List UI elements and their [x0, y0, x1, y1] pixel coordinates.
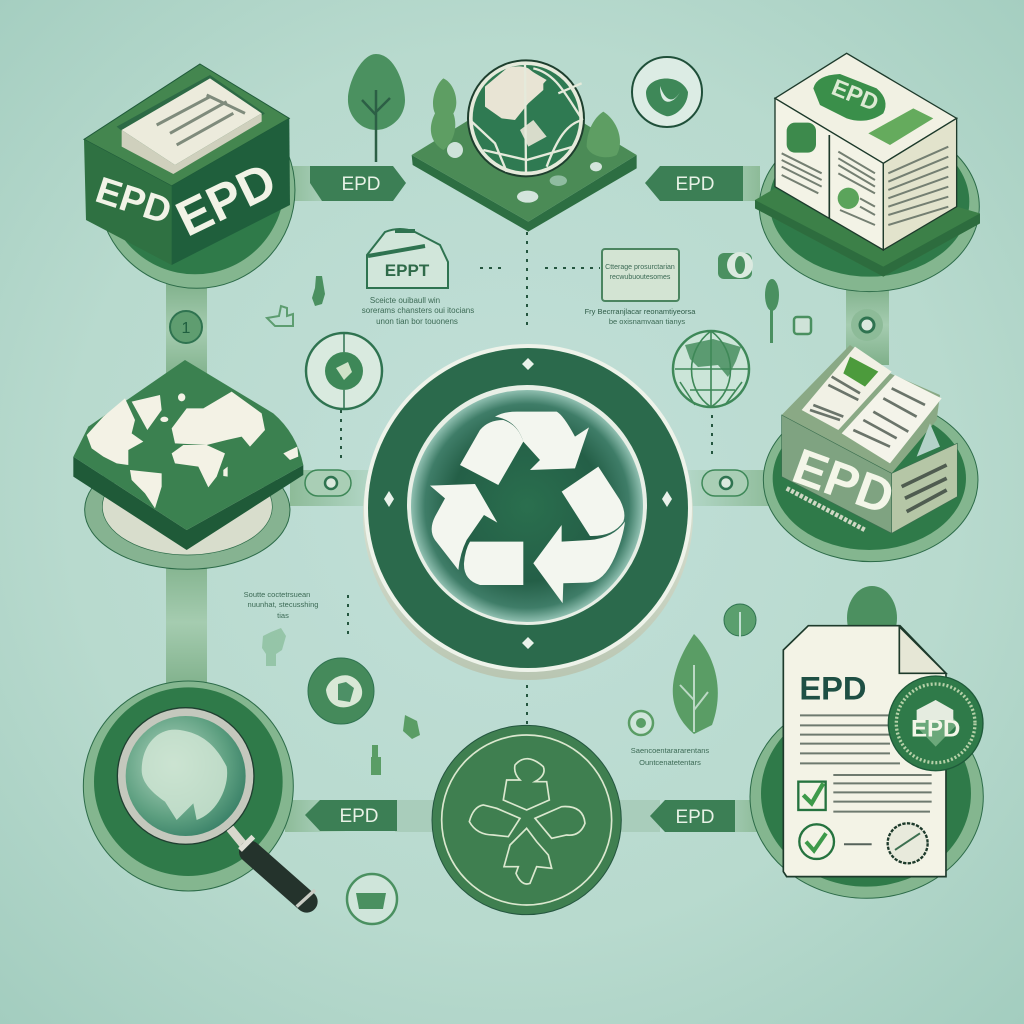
small circle icon top	[632, 57, 702, 127]
EPPT note: sorerams chansters oui itocians	[362, 306, 474, 315]
EPPT note: Sceicte ouibaull win	[370, 296, 440, 305]
top-left EPD box: EPD	[168, 152, 285, 247]
text card top right: recwubuoutesomes	[610, 274, 671, 281]
box labels: EPD	[91, 168, 177, 232]
globe platform	[412, 60, 637, 232]
top-right EPD book box: EPD	[828, 74, 882, 116]
EPD document: EPD	[799, 669, 866, 706]
small mid icons: Saencoentarararentans	[631, 746, 709, 755]
EPD seal: EPD	[911, 716, 960, 743]
text card top right	[585, 249, 696, 326]
bottom circle	[432, 725, 621, 915]
EPD tag top left	[310, 166, 406, 201]
central recycling badge	[363, 344, 693, 680]
left notes text: tias	[277, 611, 289, 620]
magnifying glass	[83, 681, 315, 907]
EPD tag bottom left	[305, 800, 397, 831]
text card top right: be oxisnamvaan tianys	[609, 317, 685, 326]
EPD document	[750, 626, 983, 898]
step 1 badge: 1	[182, 320, 191, 337]
EPD tag bottom right: EPD	[675, 807, 715, 828]
EPPT note: unon tian bor touonens	[376, 317, 458, 326]
top-right EPD book box	[755, 53, 980, 292]
EPD tag top right	[645, 166, 743, 201]
small mid icons	[371, 711, 709, 775]
recycling arrows	[430, 412, 625, 603]
right connector badge	[851, 309, 883, 341]
tree icon	[348, 54, 405, 162]
animal icon circle	[308, 658, 374, 724]
small icons mid row	[267, 252, 811, 343]
text card top right: Ctterage prosurctarian	[605, 264, 675, 271]
left notes text	[244, 590, 318, 666]
world map block	[73, 360, 303, 569]
text card top right: Fry Becrranjlacar reonamtiyeorsa	[585, 307, 696, 316]
leaf pin above document	[847, 586, 897, 650]
top-left EPD box	[84, 64, 295, 288]
connector bars	[166, 166, 889, 832]
left connector node	[305, 470, 351, 496]
small leaf pin	[724, 604, 756, 640]
step 1 badge	[170, 311, 202, 343]
EPD tag bottom right	[650, 800, 735, 832]
EPD tag top left: EPD	[341, 174, 381, 195]
globe outline icon	[673, 331, 749, 407]
large leaf	[673, 634, 718, 734]
small mid icons: Ountcenatetentars	[639, 758, 701, 767]
EPD seal	[888, 676, 983, 771]
target icon	[306, 333, 382, 409]
bottom small icon	[347, 874, 397, 924]
right connector node	[702, 470, 748, 496]
EPD tag top right: EPD	[675, 174, 715, 195]
EPPT note	[362, 229, 474, 326]
right EPD open book box: EPD	[786, 438, 901, 525]
left notes text: Soutte coctetrsuean	[244, 590, 310, 599]
right EPD open book box	[763, 345, 978, 562]
left notes text: nuunhat, stecusshing	[248, 600, 318, 609]
EPPT note: EPPT	[385, 261, 430, 280]
EPD tag bottom left: EPD	[339, 806, 379, 827]
